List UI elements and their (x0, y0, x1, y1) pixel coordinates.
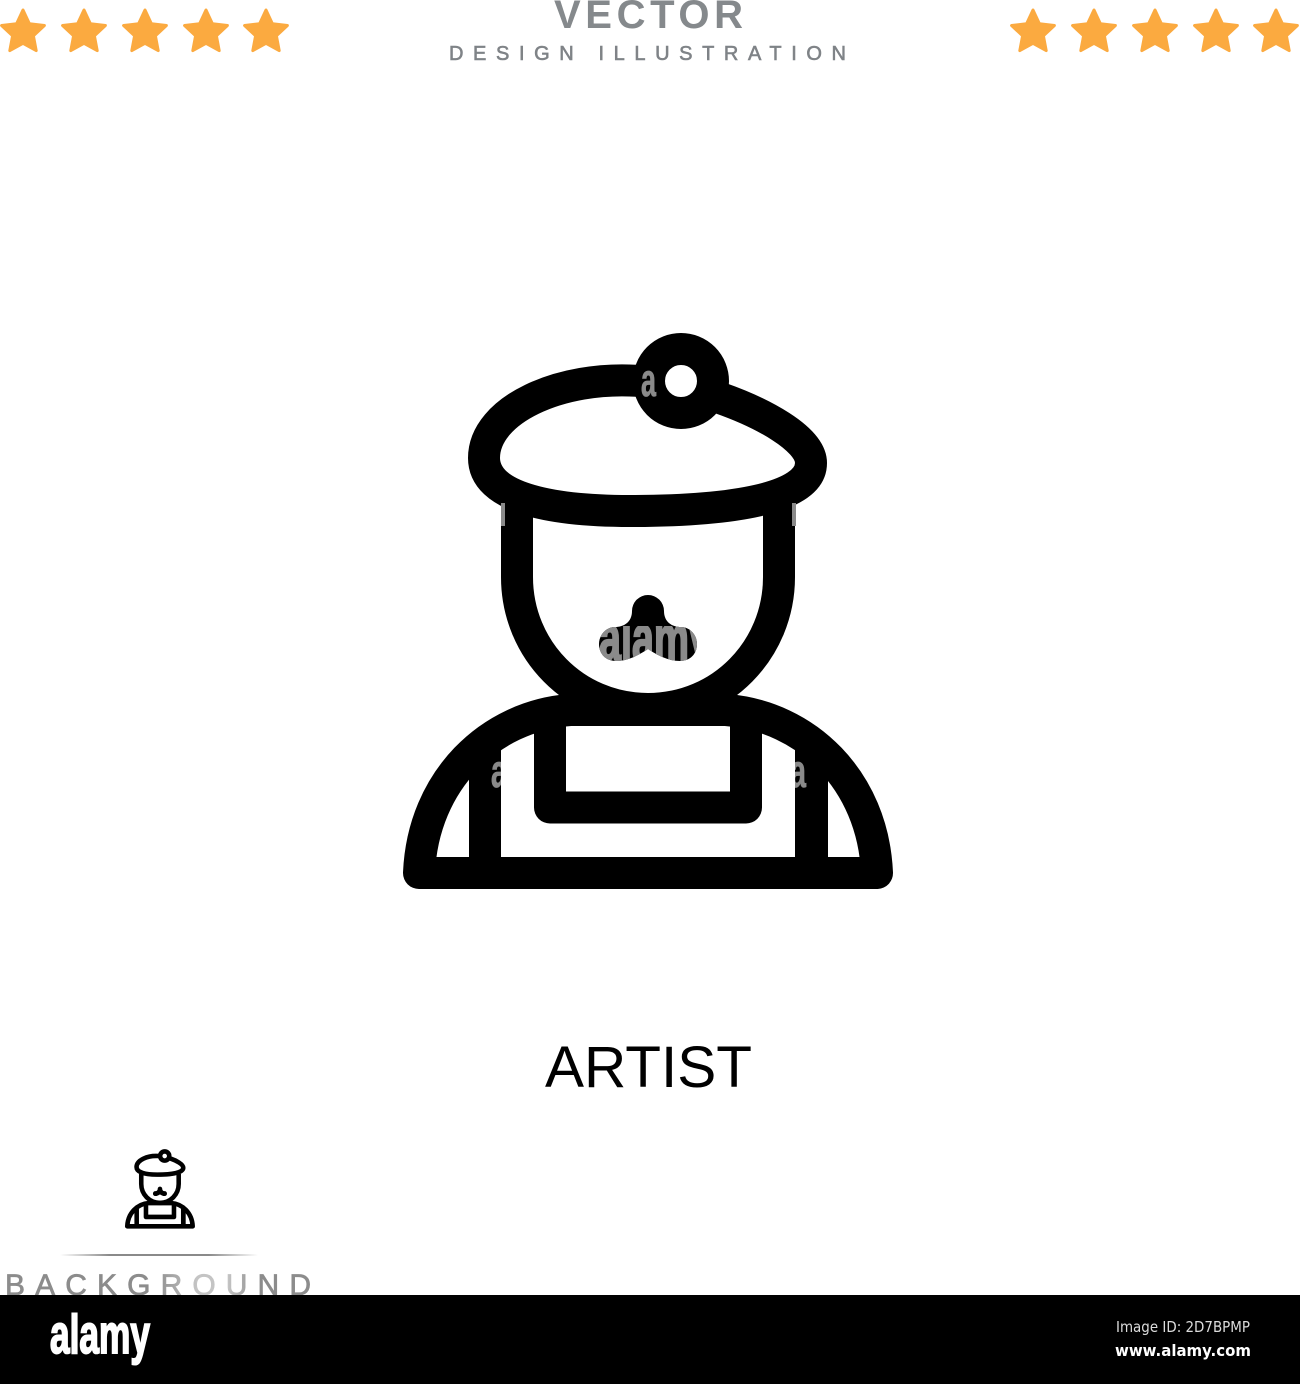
icon part: apron bib (550, 716, 746, 808)
icon part: left strap (469, 745, 501, 873)
watermark fragments over icon: a (790, 745, 806, 797)
watermark fragments over icon: alamy (599, 601, 711, 675)
subheading: DESIGN ILLUSTRATION: DESIGN ILLUSTRATION (449, 43, 846, 65)
main icon: artist (419, 349, 877, 873)
small artist icon (127, 1151, 193, 1226)
rating stars: right (1012, 10, 1297, 51)
rating stars: left (2, 10, 287, 51)
label: BACKGROUND: BACKGROUND (5, 1269, 311, 1302)
icon part: shoulders (419, 710, 877, 873)
footer bar (0, 1295, 1300, 1384)
watermark fragments over icon (491, 354, 806, 797)
footer website: www.alamy.com (1115, 1341, 1251, 1360)
caption: ARTIST: ARTIST (545, 1035, 752, 1100)
icon part: right strap (795, 745, 828, 873)
icon part: beret (484, 380, 811, 511)
footer image id: Image ID: 2D7BPMP (1116, 1318, 1250, 1336)
watermark fragments over icon: a (491, 745, 507, 797)
icon part: head (517, 505, 779, 709)
divider line above BACKGROUND (60, 1254, 258, 1256)
footer logo: alamy: alamy (50, 1303, 150, 1365)
watermark fragments over icon: a (641, 354, 656, 406)
icon part: beret pompom (649, 349, 713, 413)
icon part: moustache (599, 595, 697, 661)
